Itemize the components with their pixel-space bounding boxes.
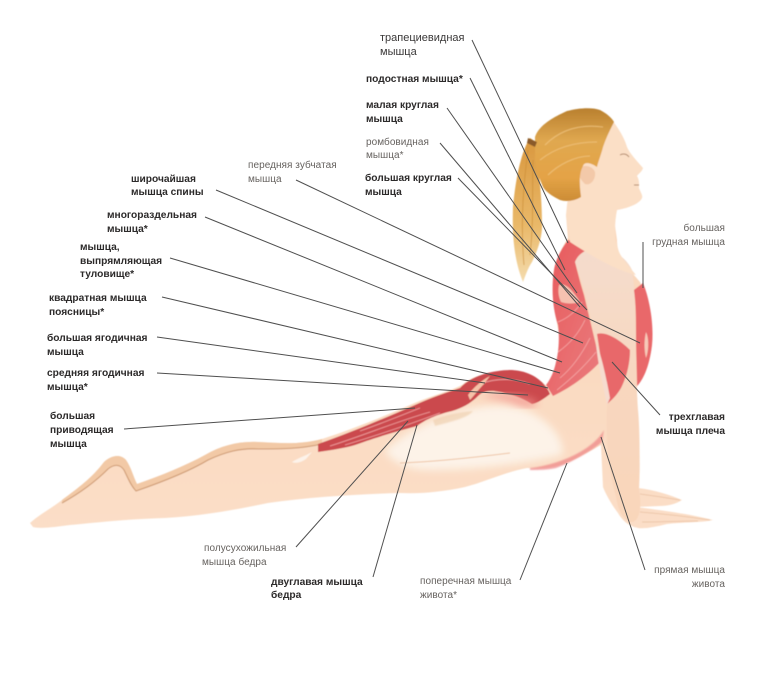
chest pale xyxy=(644,332,648,358)
leader lines xyxy=(124,40,660,580)
label: adductor magnus: приводящая xyxy=(50,425,114,436)
ear xyxy=(578,166,595,184)
label: transversus abdominis: живота* xyxy=(420,590,457,601)
adductor and gluteal muscles xyxy=(318,370,550,452)
label: trapezius: трапециевидная xyxy=(380,32,465,44)
label: latissimus dorsi: мышца спины xyxy=(131,187,204,198)
triceps muscle xyxy=(597,333,630,404)
back muscle xyxy=(546,240,600,396)
label: quadratus lumborum: квадратная мышца xyxy=(49,293,147,304)
hair highlights xyxy=(540,126,603,175)
label: semitendinosus: полусухожильная xyxy=(204,543,286,554)
label: serratus anterior: мышца xyxy=(248,174,282,185)
label: erector spinae: выпрямляющая xyxy=(80,256,162,267)
label: gluteus medius: средняя ягодичная xyxy=(47,368,144,379)
thigh crease xyxy=(400,453,510,463)
label: serratus anterior: передняя зубчатая xyxy=(248,159,337,171)
head and neck xyxy=(566,119,643,275)
label: multifidus: мышца* xyxy=(107,224,148,235)
ponytail streaks xyxy=(522,150,533,265)
label: biceps femoris: двуглавая мышца xyxy=(271,577,363,588)
label: latissimus dorsi: широчайшая xyxy=(131,174,196,185)
label: biceps femoris: бедра xyxy=(271,589,302,601)
back muscle fibres xyxy=(557,302,596,390)
thigh highlights xyxy=(385,406,562,470)
muscle fibres thigh xyxy=(330,380,530,446)
pale scapula patch xyxy=(558,284,580,304)
label: infraspinatus: подостная мышца* xyxy=(366,74,463,85)
label: pectoralis major: грудная мышца xyxy=(652,237,725,248)
label: multifidus: многораздельная xyxy=(107,210,197,221)
label: trapezius: мышца xyxy=(380,46,418,58)
label: adductor magnus: большая xyxy=(50,410,95,422)
gluteal fade xyxy=(482,393,538,407)
hair xyxy=(535,108,614,201)
label: rectus abdominis: живота xyxy=(692,579,725,590)
label: teres minor: малая круглая xyxy=(366,100,439,111)
triceps tendon xyxy=(596,344,610,405)
chest muscle xyxy=(634,283,653,386)
leg outline band xyxy=(62,444,322,503)
label: teres major: мышца xyxy=(365,187,402,198)
label: transversus abdominis: поперечная мышца xyxy=(420,576,512,587)
label: gluteus medius: мышца* xyxy=(47,382,88,393)
label: triceps: мышца плеча xyxy=(656,426,725,437)
label: rhomboid: ромбовидная xyxy=(366,136,429,148)
label: rhomboid: мышца* xyxy=(366,150,404,161)
gluteal pale highlight xyxy=(468,376,490,400)
label: gluteus maximus: мышца xyxy=(47,347,84,358)
label: teres major: большая круглая xyxy=(365,172,452,184)
ponytail xyxy=(513,138,542,282)
label: pectoralis major: большая xyxy=(684,222,725,234)
leg top tan band xyxy=(62,439,322,503)
knee highlight xyxy=(292,452,312,463)
label: erector spinae: туловище* xyxy=(80,269,134,280)
body silhouette xyxy=(30,205,713,528)
arm xyxy=(575,248,640,522)
abdomen pink edge xyxy=(530,430,604,470)
label: adductor magnus: мышца xyxy=(50,439,87,450)
eye and mouth hints xyxy=(620,154,639,185)
label: quadratus lumborum: поясницы* xyxy=(49,307,104,318)
label: gluteus maximus: большая ягодичная xyxy=(47,332,148,344)
label: semitendinosus: мышца бедра xyxy=(202,556,267,568)
figure: woman in cobra pose xyxy=(30,108,713,528)
label: teres minor: мышца xyxy=(366,114,403,125)
buttock shadow xyxy=(433,411,473,426)
label: rectus abdominis: прямая мышца xyxy=(654,565,725,576)
label: triceps: трехглавая xyxy=(669,412,725,423)
hair tie xyxy=(527,138,537,147)
hand fingers xyxy=(640,494,710,522)
label: erector spinae: мышца, xyxy=(80,242,120,253)
